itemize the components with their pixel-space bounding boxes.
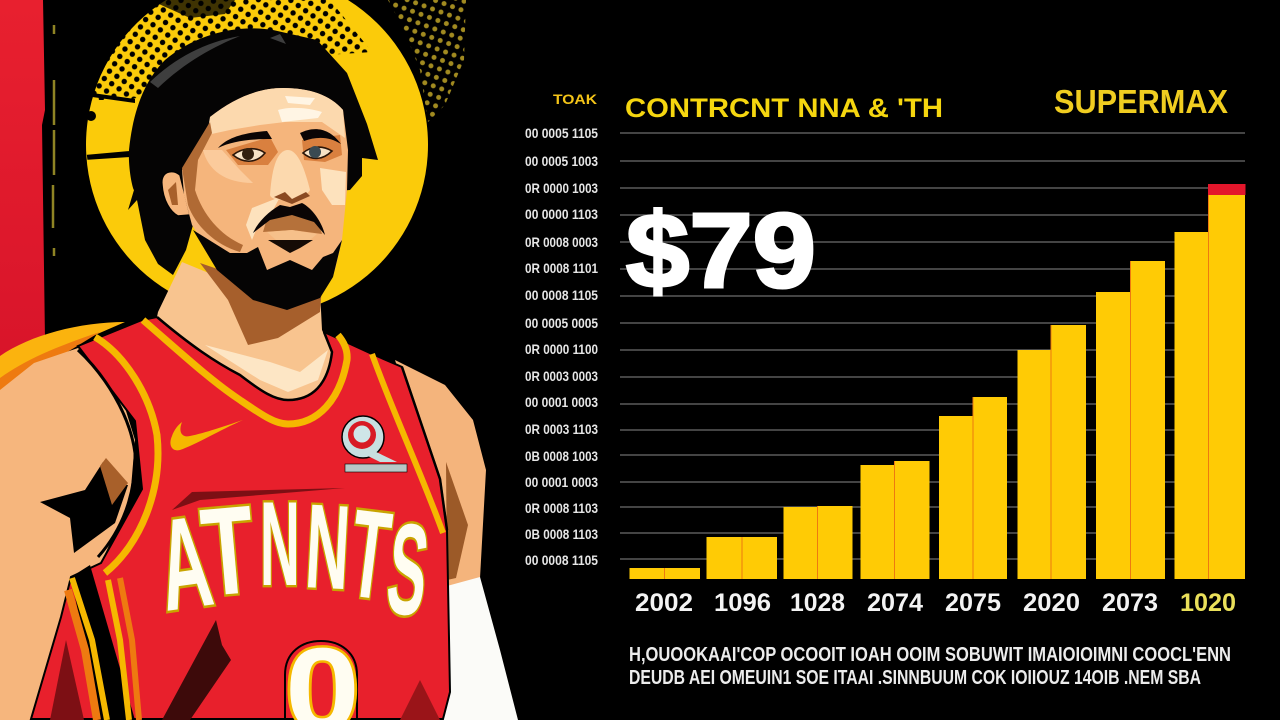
y axis labels: 00 0005 1105 [525,125,598,141]
paint splatter top right [388,0,466,122]
x axis years: 2074 [867,589,923,617]
supermax heading: SUPERMAX [1054,83,1228,120]
x axis years: 2075 [945,589,1001,617]
x axis years: 2073 [1102,589,1158,617]
y axis labels: 0R 0000 1100 [525,341,598,357]
patch logo [342,416,407,472]
y axis labels: 0R 0008 0003 [525,234,598,250]
y axis labels: 0R 0008 1101 [525,260,598,276]
jersey lettering: N [303,480,353,616]
x axis years: 2020 [1023,589,1080,617]
y axis labels: 0B 0008 1103 [525,526,598,542]
bar group 2074 [860,461,930,579]
big value: $79 [626,192,816,310]
armhole trim [95,337,158,573]
jersey [31,317,450,720]
wristband [441,577,518,720]
y axis labels: 00 0005 0005 [525,315,598,331]
ear [162,172,190,216]
bar group 2073 [1096,261,1165,579]
y axis labels: 00 0001 0003 [525,474,598,490]
jersey lettering: A [150,488,220,639]
jersey lettering [150,477,435,644]
bar group 1096 [706,537,777,579]
y axis labels: 00 0008 1105 [525,552,598,568]
moustache [253,203,325,235]
x axis years: 2002 [635,589,693,617]
bar group 1020 [1174,184,1246,579]
bar group 2075 [939,397,1007,579]
side stripes [71,565,135,720]
collar trim [143,320,347,424]
red banner strip [0,0,45,370]
eyebrows [218,131,272,148]
eyes [233,149,265,161]
x axis years [635,589,1236,617]
chart title: CONTRCNT NNA & 'TH [625,93,943,123]
hair back [128,28,378,275]
chin mark [268,240,313,253]
y axis labels: 00 0000 1103 [525,206,598,222]
side shadow [182,122,243,252]
eye sockets [226,137,278,165]
y axis labels: 0R 0008 1103 [525,500,598,516]
y axis labels: 0R 0003 0003 [525,368,598,384]
bar dividers [664,195,1208,579]
yellow halo disc with halftone [85,0,428,316]
jersey number outline [285,641,357,720]
jersey lettering: N [260,477,300,611]
bar group 1028 [784,506,852,579]
y axis labels: 0R 0003 1103 [525,421,598,437]
jersey lettering: T [196,478,260,623]
jersey lettering: T [343,483,397,626]
x axis years: 1020 [1180,589,1236,617]
bar group 2020 [1018,325,1086,579]
jersey creases [162,620,231,720]
illustration: basketball player portrait [0,0,518,720]
jersey lettering: S [381,496,435,644]
face [182,88,348,310]
right arm [395,360,486,590]
axis title: TOAK [553,91,597,107]
yellow dashed strip [53,25,54,256]
nike swoosh [170,420,243,450]
forehead light [207,88,345,138]
y axis labels: 0B 0008 1003 [525,448,598,464]
chart gridlines [620,133,1245,559]
y axis labels: 00 0005 1003 [525,153,598,169]
beard [193,230,342,310]
y axis labels [525,125,598,568]
y axis labels: 0R 0000 1003 [525,180,598,196]
left arm [0,348,135,720]
footnote text [629,644,1231,689]
y axis labels: 00 0008 1105 [525,287,598,303]
shoulder flame [0,322,125,390]
nose [270,150,310,200]
lips [263,210,322,234]
x axis years: 1028 [790,589,845,617]
y axis labels: 00 0001 0003 [525,394,598,410]
cheek light [203,150,253,183]
x axis years: 1096 [714,589,771,617]
hair highlights [150,34,286,88]
bar chart [630,184,1246,579]
bar group 2002 [630,568,700,579]
neck and chest [157,262,332,400]
